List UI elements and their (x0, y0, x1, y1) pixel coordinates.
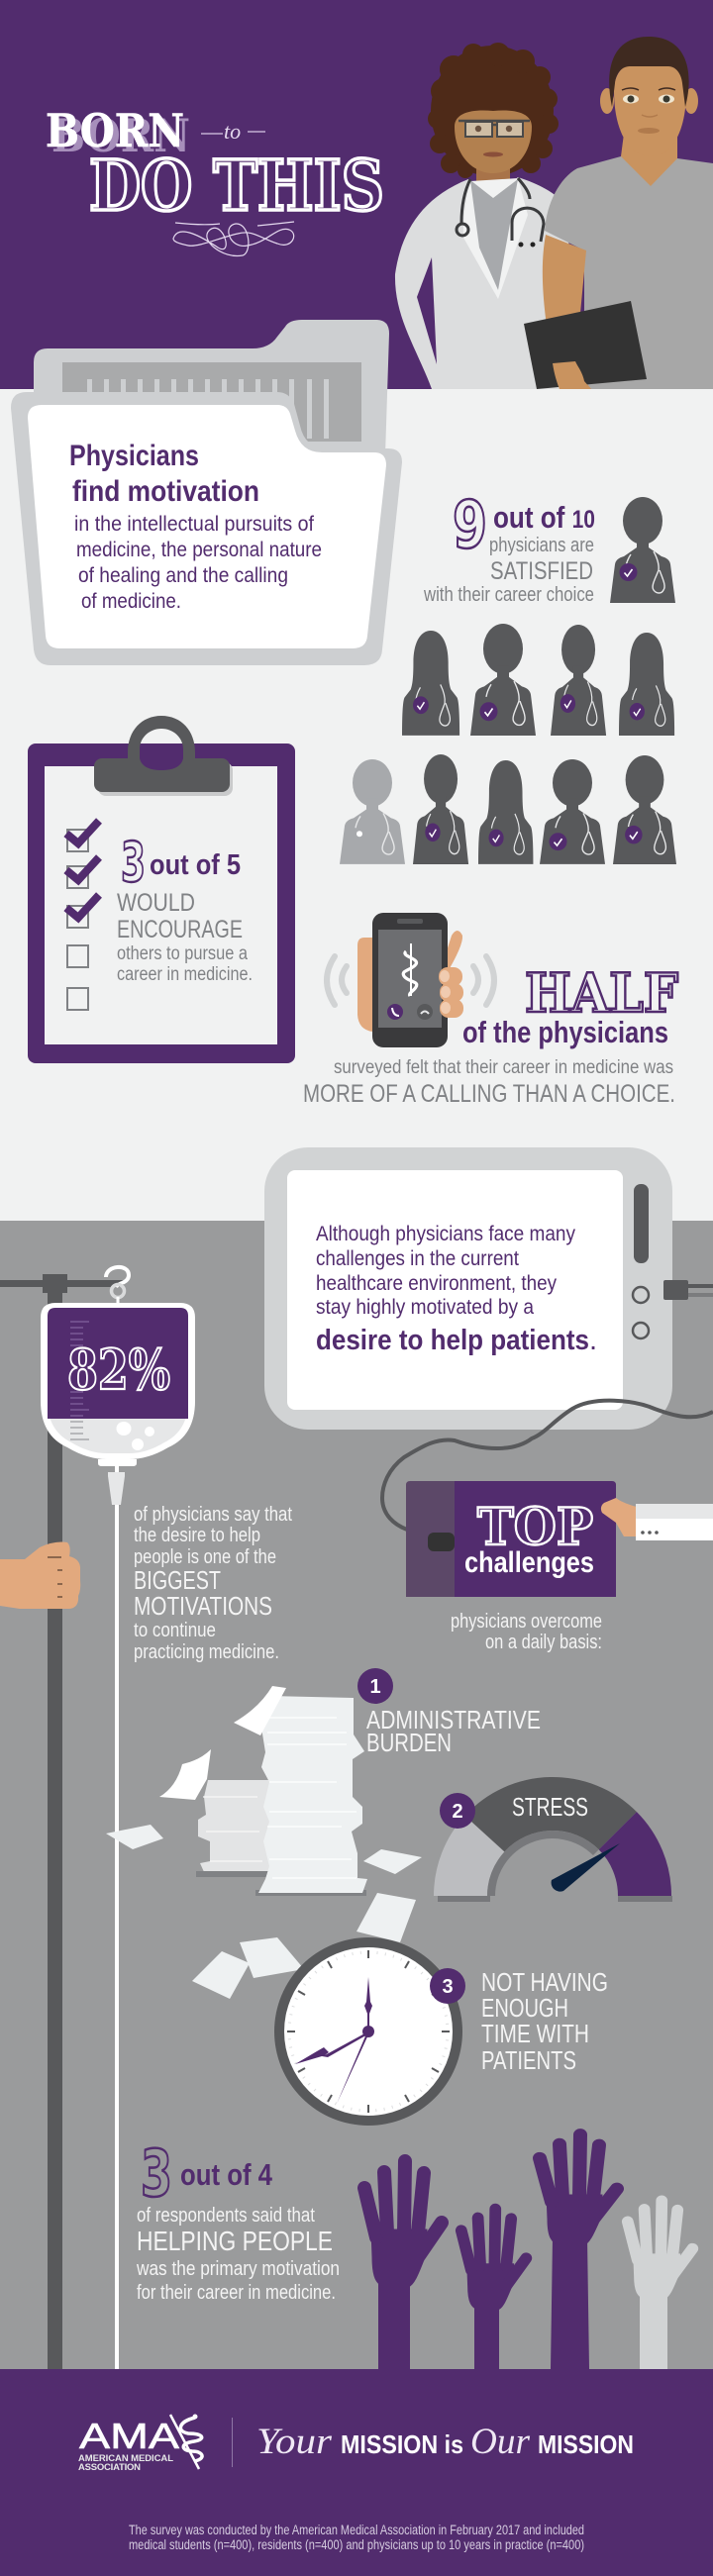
stat: 9 out of 10 satisfied: physicians are (489, 535, 594, 556)
chart: stress gauge (434, 1777, 672, 1902)
text block: half of the physicians (303, 961, 678, 1108)
text block: 3 out of 5 would encourage: ENCOURAGE (117, 916, 243, 943)
text block: monitor message: stay highly motivated by a (316, 1296, 534, 1319)
title: Born to Do This: BORN (51, 109, 190, 162)
tagline: Your Mission is Our Mission: Your (256, 2422, 333, 2462)
text block: of physicians biggest motivations: to continue (134, 1620, 216, 1641)
icon: clipboard clip (94, 716, 233, 796)
checklist boxes (67, 830, 88, 1010)
text block: monitor message (316, 1223, 597, 1356)
panel: top challenges plug: TOP (477, 1498, 593, 1557)
label: administrative burden: BURDEN (366, 1728, 452, 1757)
panel: footer (0, 2369, 713, 2576)
title: Born to Do This: BORN (46, 104, 184, 157)
hand 4 (628, 2201, 692, 2369)
panel: top challenges plug: challenges (464, 1546, 594, 1579)
label: not having enough time with patients: NOT HAVING (481, 1967, 608, 1997)
pictogram: physician silhouettes (340, 497, 676, 864)
tagline: Your Mission is Our Mission: MISSION is (341, 2429, 463, 2459)
label: not having enough time with patients: PATIENTS (481, 2045, 576, 2075)
heading: Physicians find motivation (69, 440, 259, 508)
icon: clock (274, 1937, 462, 2126)
text block: motivation description: of healing and the calling (78, 564, 288, 587)
text block: monitor message: healthcare environment, they (316, 1272, 557, 1295)
number badge 2 (440, 1793, 475, 1829)
background: light section (0, 389, 713, 1221)
panel: monitor with desire to help patients (264, 1147, 713, 1430)
icon: hand holding phone (327, 913, 494, 1047)
text block: half of the physicians: surveyed felt that their career in medicine was (334, 1057, 673, 1078)
illustration: man in scrubs with clipboard (524, 37, 713, 389)
icon: IV pole (0, 1274, 124, 2369)
number badge 1 (357, 1668, 393, 1704)
text block: of physicians biggest motivations: practicing medicine. (134, 1641, 279, 1663)
text block: of physicians biggest motivations: people is one of the (134, 1546, 276, 1568)
stat: 3 out of 4 helping people (136, 2137, 340, 2304)
stat: 9 out of 10 satisfied: SATISFIED (490, 557, 593, 585)
tagline: Your Mission is Our Mission: MISSION (538, 2429, 634, 2459)
hand 2 (461, 2209, 526, 2369)
text block: 3 out of 5 would encourage: 3 (121, 831, 146, 894)
number badge 2: 2 (452, 1801, 463, 1823)
label: not having enough time with patients: ENOUGH (481, 1993, 568, 2023)
text block: 3 out of 5 would encourage: career in medicine. (117, 964, 253, 985)
hand 1 (364, 2161, 442, 2369)
panel: folder with motivation text (11, 320, 402, 665)
text block: half of the physicians: HALF (525, 961, 678, 1025)
stat: 3 out of 4 helping people: 3 (141, 2137, 172, 2212)
number badge 3: 3 (442, 1976, 454, 1998)
icon: physician row 1 figure 3 (551, 625, 606, 736)
icon: IV bag 82%: 82% (67, 1338, 170, 1403)
text block: motivation description (74, 513, 322, 613)
text block: of physicians biggest motivations: BIGGEST (134, 1565, 221, 1595)
title: Born to Do This: DO THIS (89, 145, 384, 227)
text block: 3 out of 5 would encourage: WOULD (117, 889, 195, 917)
logo: American Medical Association: AMA (79, 2416, 179, 2456)
icon: paper stacks (106, 1686, 422, 1999)
text block: monitor message: desire to help patients (316, 1325, 589, 1356)
icon: hand gripping pole (0, 1542, 80, 1609)
heading: Physicians find motivation: find motivation (72, 475, 259, 508)
text block: monitor message: challenges in the current (316, 1247, 519, 1270)
text block: of physicians biggest motivations: of physicians say that (134, 1504, 292, 1526)
text block: of physicians biggest motivations: MOTIVATIONS (134, 1591, 272, 1621)
footnote: survey methodology: medical students (n=400), residents (n=400) and physicians up to 10 years in practice (n=400) (129, 2537, 584, 2552)
logo: American Medical Association: AMERICAN MEDICAL (78, 2453, 173, 2464)
panel: top challenges plug (406, 1481, 713, 1597)
number badge 1: 1 (369, 1676, 381, 1698)
icon: physician row 2 figure 5 (613, 755, 676, 864)
text block: motivation description: of medicine. (81, 590, 181, 613)
stat: 3 out of 4 helping people: out of 4 (180, 2157, 273, 2192)
icon: physician row 2 figure 3 (478, 760, 533, 864)
stat: 3 out of 4 helping people: HELPING PEOPLE (137, 2226, 333, 2256)
text block: physicians overcome: physicians overcome (451, 1611, 602, 1633)
checkmarks (66, 821, 99, 918)
text block: half of the physicians: of the physicians (462, 1015, 668, 1049)
icon: physician row 2 figure 1 (not satisfied) (340, 759, 405, 864)
panel: hero banner (0, 0, 713, 389)
stat: 9 out of 10 satisfied: with their career choice (423, 584, 594, 606)
hand 3 (540, 2134, 617, 2369)
icon: raised hands (364, 2134, 692, 2369)
logo: American Medical Association: ASSOCIATION (78, 2462, 141, 2473)
text block: motivation description: medicine, the personal nature (76, 539, 322, 561)
icon: IV bag 82% (41, 1303, 195, 2369)
stat: 3 out of 4 helping people: of respondents said that (137, 2205, 315, 2227)
text block: 3 out of 5 would encourage: out of 5 (150, 849, 241, 881)
title: Born to Do This: to (224, 119, 241, 144)
text block: 3 out of 5 would encourage (117, 831, 253, 985)
logo: American Medical Association (78, 2414, 202, 2473)
label: not having enough time with patients: TIME WITH (481, 2019, 589, 2048)
icon: physician with check (610, 497, 675, 603)
heading: Physicians find motivation: Physicians (69, 440, 199, 472)
text block: monitor message: Although physicians face many (316, 1223, 575, 1245)
background: grey section (0, 1221, 713, 2369)
icon: IV hook (106, 1267, 129, 1305)
label: administrative burden (366, 1705, 541, 1757)
text block: monitor message: . (589, 1325, 597, 1356)
tagline: Your Mission is Our Mission (256, 2422, 634, 2462)
icon: hand and cuff (601, 1498, 713, 1540)
glasses (458, 121, 530, 137)
stat: 9 out of 10 satisfied: out of 10 (493, 500, 595, 535)
text block: physicians overcome (451, 1611, 602, 1653)
text block: of physicians biggest motivations: the desire to help (134, 1525, 260, 1546)
text block: 3 out of 5 would encourage: others to pursue a (117, 943, 248, 964)
arrow: cable from monitor to plug (382, 1401, 713, 1530)
icon: physician row 1 figure 4 (619, 633, 674, 736)
text block: physicians overcome: on a daily basis: (485, 1632, 602, 1653)
icon: physician row 1 figure 1 (402, 631, 459, 736)
tagline: Your Mission is Our Mission: Our (470, 2422, 531, 2462)
title: Born to Do This (46, 104, 384, 256)
flying sheets (159, 1686, 286, 1800)
stat: 9 out of 10 satisfied: 9 (453, 487, 487, 563)
icon: physician row 2 figure 4 (540, 759, 605, 864)
text block: motivation description: in the intellectual pursuits of (74, 513, 314, 536)
label: administrative burden: ADMINISTRATIVE (366, 1705, 541, 1734)
number badge 3 (430, 1968, 465, 2004)
stat: 3 out of 4 helping people: was the primary motivation (136, 2258, 340, 2280)
panel: clipboard 3 out of 5 (28, 716, 295, 1063)
illustration: woman doctor (395, 43, 584, 389)
icon: physician row 2 figure 2 (413, 754, 468, 864)
icon: physician row 1 figure 2 (470, 624, 536, 736)
footnote: survey methodology (129, 2523, 584, 2552)
text block: of physicians biggest motivations (134, 1504, 292, 1663)
chart: stress gauge: STRESS (512, 1792, 588, 1822)
stat: 9 out of 10 satisfied (423, 487, 595, 606)
label: not having enough time with patients (481, 1967, 608, 2075)
stat: 3 out of 4 helping people: for their career in medicine. (137, 2282, 336, 2304)
footnote: survey methodology: The survey was conducted by the American Medical Association in February 2017 and included (129, 2523, 584, 2537)
